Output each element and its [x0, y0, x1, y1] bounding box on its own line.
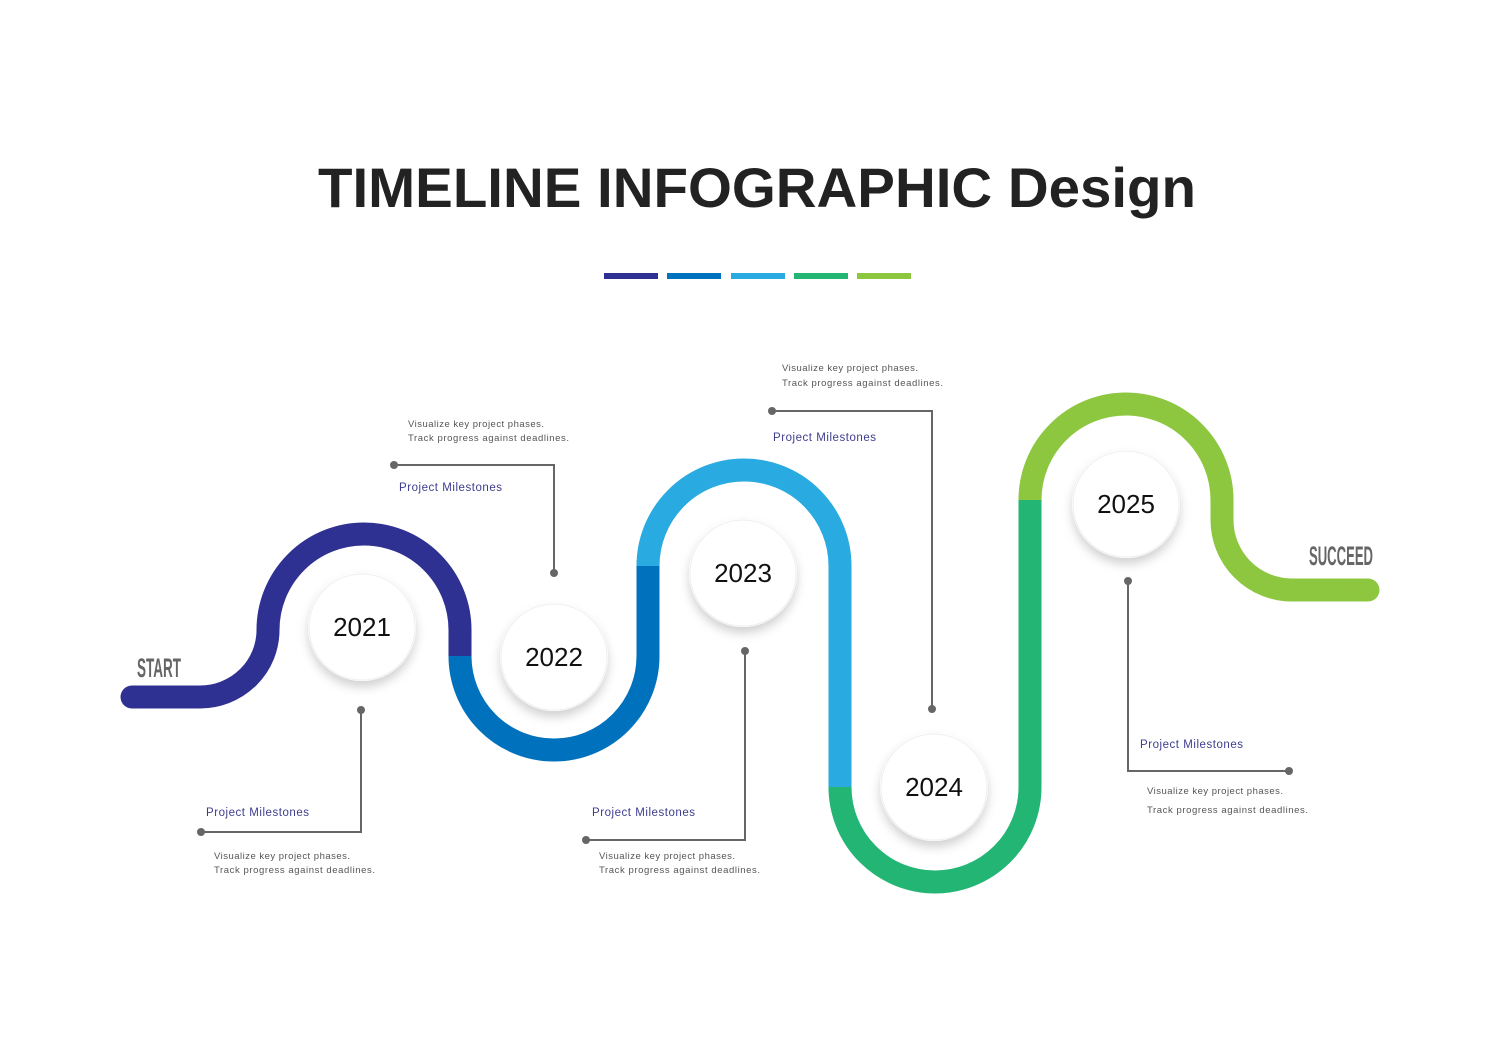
- callout 2021: Project Milestones: [206, 807, 309, 819]
- callout 2021: Visualize key project phases.: [214, 851, 350, 862]
- year circle 2023: 2023: [714, 558, 772, 588]
- callout 2025: Track progress against deadlines.: [1147, 805, 1308, 816]
- year circle 2022: [500, 603, 608, 711]
- year circle 2025: [1072, 450, 1180, 558]
- callout 2021: Track progress against deadlines.: [214, 865, 375, 876]
- callout 2024: Track progress against deadlines.: [782, 378, 943, 389]
- start label: START: [137, 653, 181, 683]
- callout 2022: Visualize key project phases.: [408, 419, 544, 430]
- callout 2024: Visualize key project phases.: [782, 363, 918, 374]
- callout 2025: Visualize key project phases.: [1147, 786, 1283, 797]
- callout 2025: Project Milestones: [1140, 739, 1243, 751]
- year circle 2021: [308, 573, 416, 681]
- callout 2021: [197, 706, 375, 876]
- callout 2023: [582, 647, 760, 876]
- text: SUCCEED: [1309, 541, 1373, 571]
- callout 2024: Project Milestones: [773, 432, 876, 444]
- year circle 2022: 2022: [525, 642, 583, 672]
- year circle 2024: [880, 733, 988, 841]
- callout 2023: Visualize key project phases.: [599, 851, 735, 862]
- callout 2022: Track progress against deadlines.: [408, 433, 569, 444]
- year circle 2025: 2025: [1097, 489, 1155, 519]
- year circle 2024: 2024: [905, 772, 963, 802]
- callout 2025: [1124, 577, 1308, 816]
- timeline path: [120, 404, 1380, 882]
- year circle 2023: [689, 519, 797, 627]
- callout 2022: [390, 419, 569, 577]
- year circle 2021: 2021: [333, 612, 391, 642]
- color bar legend: [604, 273, 911, 279]
- callout 2023: Track progress against deadlines.: [599, 865, 760, 876]
- callout 2023: Project Milestones: [592, 807, 695, 819]
- title: TIMELINE INFOGRAPHIC Design: [318, 156, 1196, 219]
- callout 2022: Project Milestones: [399, 482, 502, 494]
- callout 2024: [768, 363, 943, 713]
